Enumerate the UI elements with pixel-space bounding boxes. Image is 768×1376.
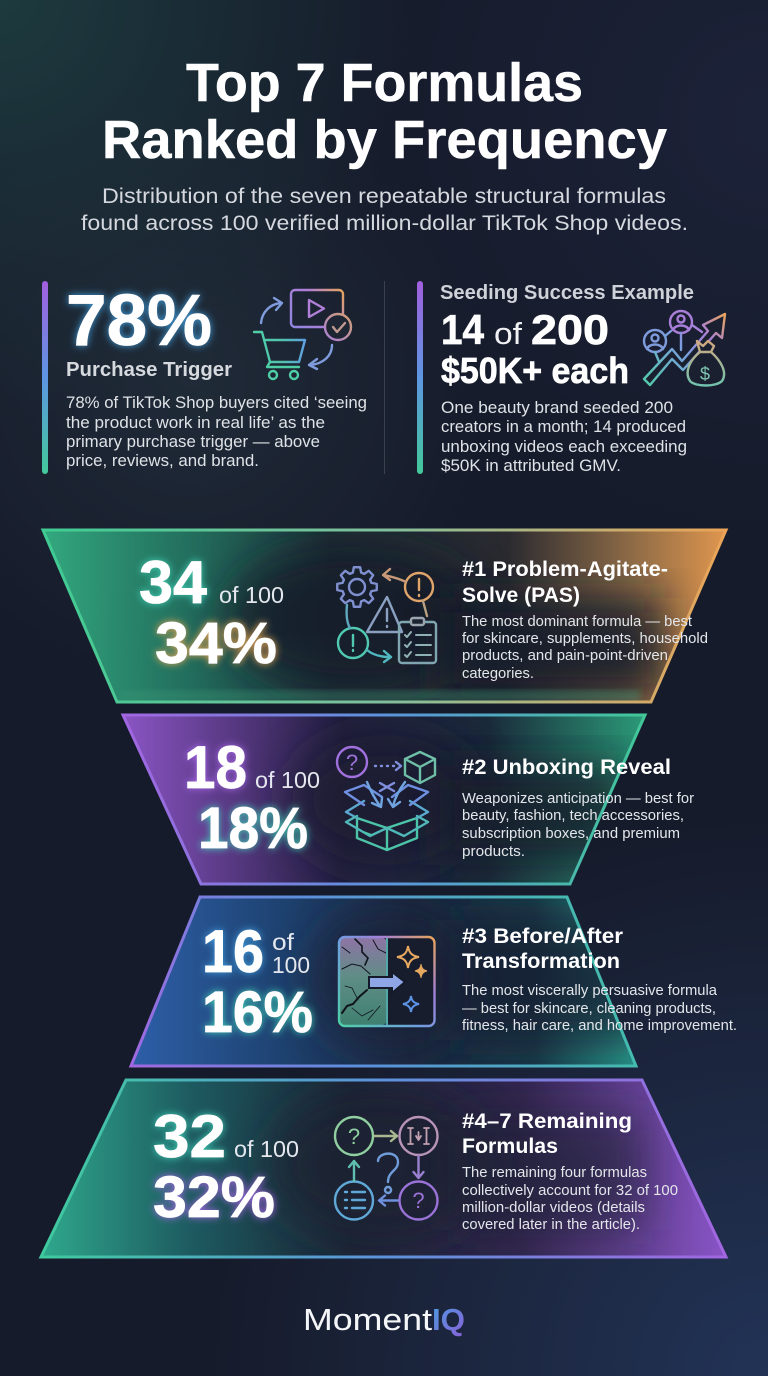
stat: 18 of 100: of 100 — [255, 767, 320, 793]
stat: 32 of 100 — [153, 1103, 299, 1170]
stat: 16 of 100: of — [272, 929, 295, 955]
icon: remaining formulas loop — [335, 1117, 438, 1220]
description: products, and pain-point-driven — [462, 648, 668, 664]
description: — best for skincare, cleaning products, — [462, 1001, 716, 1017]
logo: MomentIQ: Moment — [303, 1302, 432, 1337]
description: subscription boxes, and premium — [462, 826, 680, 842]
icon: cart and video loop — [254, 290, 351, 379]
body text: One beauty brand seeded 200 — [441, 398, 673, 417]
subtitle — [81, 184, 688, 235]
description: Weaponizes anticipation — best for — [462, 791, 694, 807]
body text — [441, 398, 687, 475]
body text: the product work in real life’ as the — [66, 413, 325, 432]
description: beauty, fashion, tech accessories, — [462, 808, 684, 824]
description: million-dollar videos (details — [462, 1200, 645, 1216]
body text: primary purchase trigger — above — [66, 432, 320, 451]
heading: Transformation — [462, 949, 620, 973]
heading: Solve (PAS) — [462, 583, 580, 607]
stat: 18 of 100 — [184, 734, 320, 801]
stat: 18 of 100: 18 — [184, 734, 247, 801]
heading: Seeding Success Example — [440, 282, 694, 304]
stat: 34%: 34% — [155, 611, 277, 676]
subtitle: found across 100 verified million-dollar TikTok Shop videos. — [81, 211, 688, 235]
description: collectively account for 32 of 100 — [462, 1183, 678, 1199]
title: Top 7 Formulas — [186, 53, 583, 113]
description: for skincare, supplements, household — [462, 631, 708, 647]
description: The most dominant formula — best — [462, 614, 692, 630]
body text: $50K in attributed GMV. — [441, 456, 621, 475]
stat: 14 of 200: of — [494, 316, 522, 351]
heading — [462, 924, 624, 973]
heading — [462, 1109, 632, 1158]
description: covered later in the article). — [462, 1217, 640, 1233]
stat: 16%: 16% — [202, 980, 313, 1045]
panel: purchase trigger stat — [42, 281, 367, 474]
stat: 34 of 100: of 100 — [219, 582, 284, 608]
body text: unboxing videos each exceeding — [441, 437, 687, 456]
title — [102, 53, 667, 170]
icon: unboxing — [337, 747, 435, 850]
subtitle: Distribution of the seven repeatable structural formulas — [102, 184, 666, 208]
stat: 32%: 32% — [153, 1165, 275, 1230]
heading: #2 Unboxing Reveal — [462, 755, 671, 779]
body text: price, reviews, and brand. — [66, 451, 259, 470]
stat: 32 of 100: 32 — [153, 1103, 226, 1170]
icon: remaining formulas loop: ? — [412, 1188, 425, 1213]
icon: remaining formulas loop: ? — [348, 1124, 360, 1149]
stat: $50K+ each: $50K+ each — [441, 350, 629, 391]
description — [462, 983, 737, 1034]
logo: MomentIQ — [303, 1302, 465, 1337]
heading — [462, 557, 668, 607]
stat: 78%: 78% — [66, 281, 212, 361]
stat: 14 of 200: 14 — [441, 306, 485, 353]
description — [462, 614, 708, 682]
icon: before and after — [339, 937, 434, 1026]
description: categories. — [462, 666, 534, 682]
stat: 18%: 18% — [198, 796, 308, 861]
heading: #1 Problem-Agitate- — [462, 557, 668, 581]
heading: Formulas — [462, 1134, 558, 1158]
heading: #3 Before/After — [462, 924, 624, 948]
stat: 16 of 100: 100 — [272, 952, 310, 978]
panel: #2 unboxing reveal — [120, 714, 694, 886]
stat: 32 of 100: of 100 — [234, 1136, 299, 1162]
body text: 78% of TikTok Shop buyers cited ‘seeing — [66, 393, 367, 412]
description — [462, 1165, 678, 1233]
stat: 14 of 200 — [441, 306, 609, 353]
stat: 34 of 100: 34 — [139, 549, 208, 616]
panel: seeding success example — [417, 281, 725, 475]
logo: MomentIQ: IQ — [432, 1302, 465, 1337]
description: The remaining four formulas — [462, 1165, 647, 1181]
body text — [66, 393, 367, 470]
stat: 16 of 100 — [202, 918, 310, 985]
icon: creators growth money bag — [644, 311, 725, 386]
title: Ranked by Frequency — [102, 110, 667, 170]
panel: #1 problem-agitate-solve — [40, 528, 728, 704]
icon: question mark: ? — [346, 750, 358, 775]
description: fitness, hair care, and home improvement. — [462, 1018, 737, 1034]
description — [462, 791, 694, 860]
heading: #4–7 Remaining — [462, 1109, 632, 1133]
panel: #3 before/after transformation — [120, 890, 737, 1075]
stat: 16 of 100: 16 — [202, 918, 264, 985]
stat: 14 of 200: 200 — [531, 306, 609, 353]
icon: dollar sign: $ — [700, 364, 710, 384]
stat: 34 of 100 — [139, 549, 284, 616]
description: products. — [462, 844, 525, 860]
icon: problem loop — [337, 567, 436, 663]
stat label: Purchase Trigger — [66, 358, 232, 381]
panel: #4-7 remaining formulas — [38, 1078, 728, 1258]
body text: creators in a month; 14 produced — [441, 417, 686, 436]
description: The most viscerally persuasive formula — [462, 983, 718, 999]
